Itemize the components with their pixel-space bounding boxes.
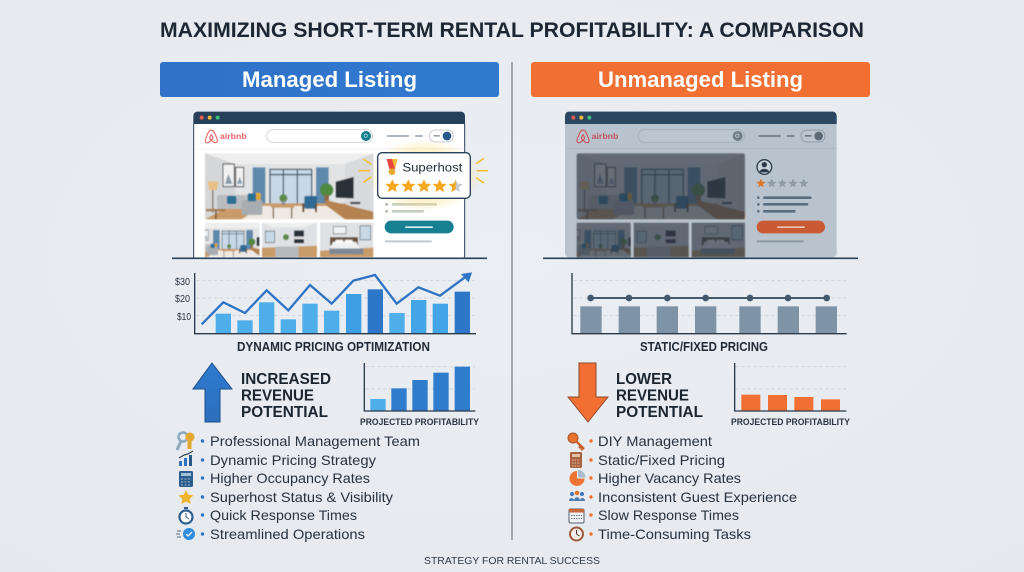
footer: STRATEGY FOR RENTAL SUCCESS [424,555,600,567]
heading: managed listing: Managed Listing [242,67,417,92]
chart caption: static pricing: STATIC/FIXED PRICING [640,340,768,354]
list row: professional management team: Professional Management Team [210,433,420,449]
list row: time-consuming tasks: Time-Consuming Tasks [598,526,751,542]
chart caption: dynamic pricing: DYNAMIC PRICING OPTIMIZATION [237,340,430,354]
revenue callout: lower: POTENTIAL [616,404,703,421]
chart axis labels: $10 [177,311,191,323]
revenue callout: increased [241,371,331,421]
revenue callout: increased: INCREASED [241,371,331,388]
list row: slow response times: Slow Response Times [598,507,739,523]
browser mockup: unmanaged listing: airbnb [592,131,618,141]
center divider [512,62,513,540]
revenue callout: lower [616,371,703,421]
revenue callout: lower: REVENUE [616,388,689,404]
browser baseline [172,258,487,259]
revenue callout: increased: POTENTIAL [241,404,328,421]
browser baseline [543,258,858,259]
list row: higher occupancy rates: Higher Occupancy Rates [210,470,370,486]
revenue callout: lower: LOWER [616,371,672,388]
heading: managed listing [160,62,499,97]
list row: diy management: DIY Management [598,433,712,449]
superhost badge [359,139,487,211]
browser mockup: managed listing [188,112,465,257]
chart axis labels: $30 [175,276,190,288]
chart: projected profitability unmanaged [735,363,846,411]
heading: unmanaged listing [531,62,870,97]
list row: static pricing: Static/Fixed Pricing [598,452,725,468]
drawback list: unmanaged [568,433,797,542]
title: MAXIMIZING SHORT-TERM RENTAL PROFITABILITY: A COMPARISON [160,18,864,42]
icon: up arrow [193,363,232,422]
chart: static pricing [572,273,847,334]
panel: managed listing [160,62,499,542]
panel: unmanaged listing [531,62,870,542]
chart caption: projected profitability unmanaged: PROJECTED PROFITABILITY [731,417,851,428]
chart: dynamic pricing [195,272,476,334]
list row: superhost status: Superhost Status & Visibility [210,489,393,505]
chart axis labels: $20 [175,293,190,305]
chart caption: projected profitability managed: PROJECTED PROFITABILITY [360,417,480,428]
list row: dynamic pricing strategy: Dynamic Pricing Strategy [210,452,376,468]
browser mockup: managed listing: airbnb [220,131,247,141]
list row: inconsistent guest experience: Inconsistent Guest Experience [598,489,797,505]
revenue callout: increased: REVENUE [241,388,314,404]
heading: unmanaged listing: Unmanaged Listing [598,67,803,92]
icon: down arrow [568,363,608,422]
list row: higher vacancy rates: Higher Vacancy Rates [598,470,741,486]
chart: projected profitability managed [364,363,475,411]
superhost badge: Superhost [402,161,463,175]
list row: streamlined operations: Streamlined Operations [210,526,365,542]
browser mockup: unmanaged listing [559,112,837,257]
chart axis labels [175,276,191,323]
list row: quick response times: Quick Response Times [210,507,357,523]
benefit list: managed [176,432,420,542]
